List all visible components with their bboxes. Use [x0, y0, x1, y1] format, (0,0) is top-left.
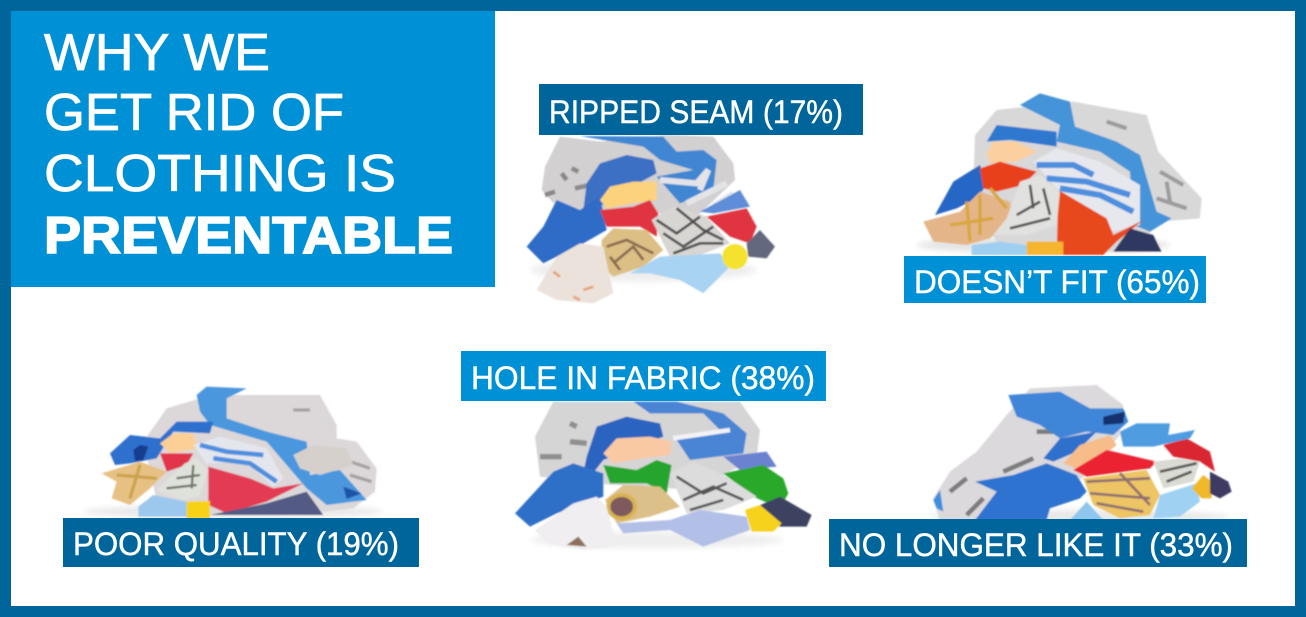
label: poor quality — [63, 518, 419, 567]
label: doesn't fit: DOESN’T FIT (65%) — [914, 264, 1200, 300]
clothing pile: hole in fabric — [515, 402, 812, 550]
label: poor quality: POOR QUALITY (19%) — [73, 526, 399, 562]
clothing pile: doesn't fit — [917, 93, 1202, 255]
label: ripped seam: RIPPED SEAM (17%) — [549, 94, 843, 130]
label: no longer like it: NO LONGER LIKE IT (33%) — [839, 527, 1233, 563]
title panel — [11, 11, 495, 287]
title panel: PREVENTABLE — [44, 207, 453, 265]
label: hole in fabric: HOLE IN FABRIC (38%) — [471, 360, 815, 396]
clothing pile: no longer like it — [930, 385, 1232, 523]
label: hole in fabric — [461, 351, 826, 401]
clothing pile: poor quality — [83, 387, 383, 518]
title panel: CLOTHING IS — [44, 145, 396, 203]
clothing pile: ripped seam — [527, 135, 775, 303]
title panel: GET RID OF — [44, 84, 344, 142]
title panel: WHY WE — [44, 24, 270, 82]
label: ripped seam — [539, 84, 863, 135]
